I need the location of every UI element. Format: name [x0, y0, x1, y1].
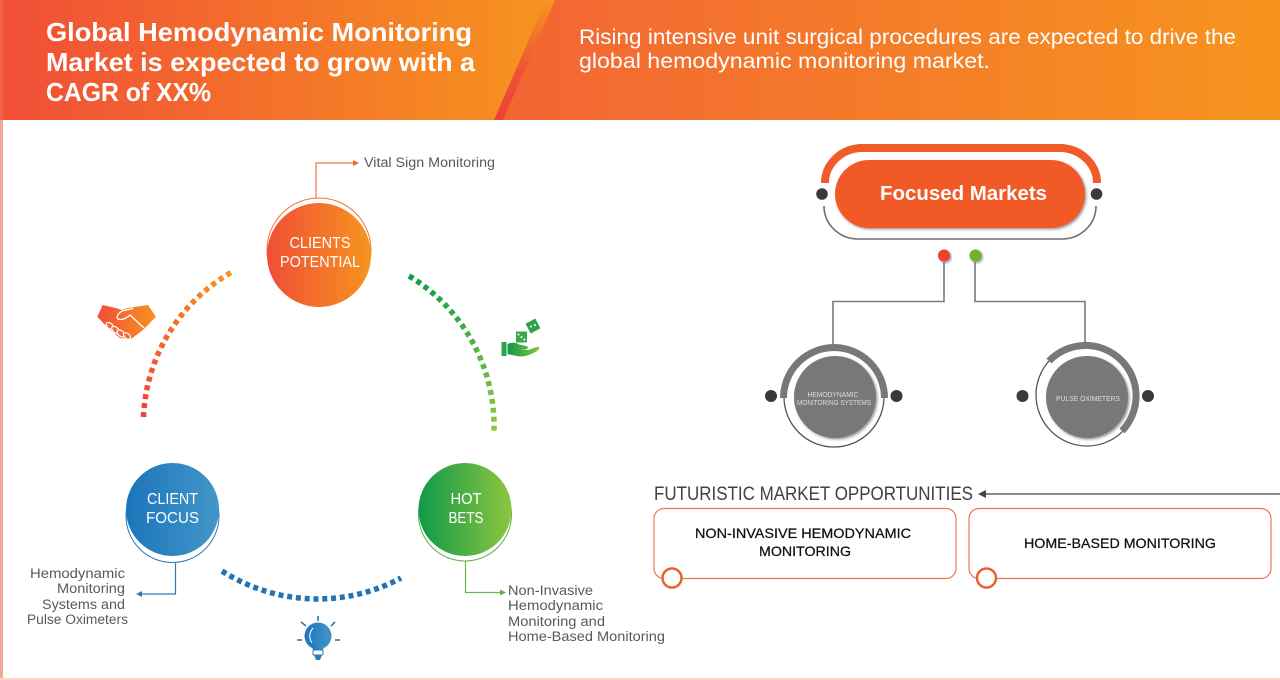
heading: futuristic market opportunities: FUTURISTIC MARKET OPPORTUNITIES: [654, 484, 973, 505]
node: hemodynamic monitoring systems: MONITORING SYSTEMS: [797, 398, 871, 407]
node: client focus: FOCUS: [146, 510, 199, 527]
label: client focus details: Pulse Oximeters: [27, 612, 128, 627]
card: non-invasive hemodynamic monitoring: NON-INVASIVE HEMODYNAMIC: [695, 525, 911, 541]
header banner: [0, 0, 1280, 120]
focused markets badge: Focused Markets: [880, 183, 1047, 205]
label: client focus details: Systems and: [42, 597, 125, 612]
label: hot bets details: Hemodynamic: [508, 598, 603, 613]
dashed arc: clients potential to client focus: [144, 272, 232, 417]
icon: light bulb: [297, 616, 340, 660]
title: Global Hemodynamic Monitoring: [46, 17, 472, 47]
card: home-based monitoring: [969, 508, 1271, 588]
icon: hand with dice: [502, 319, 540, 356]
node: clients potential: [267, 198, 371, 307]
subtitle: [579, 25, 1236, 73]
label: hot bets details: Monitoring and: [508, 614, 605, 629]
label: client focus details: [27, 566, 128, 627]
label: hot bets details: Non-Invasive: [508, 583, 593, 598]
node: hemodynamic monitoring systems: HEMODYNAMIC: [808, 390, 859, 399]
card: non-invasive hemodynamic monitoring: [654, 508, 956, 588]
title: Market is expected to grow with a: [46, 47, 476, 77]
node: pulse oximeters: [1016, 344, 1154, 446]
label: hot bets details: [508, 583, 665, 644]
node: clients potential: POTENTIAL: [280, 254, 360, 271]
label: client focus details: Monitoring: [57, 581, 125, 596]
connector: pulse oximeters: [970, 250, 1085, 344]
title: CAGR of XX%: [46, 77, 211, 107]
connector: client focus: [136, 563, 176, 597]
node: client focus: CLIENT: [147, 491, 198, 508]
focused markets badge: [816, 148, 1102, 239]
label: hot bets details: Home-Based Monitoring: [508, 629, 665, 644]
connector: vital sign: [316, 160, 359, 198]
node: hemodynamic monitoring systems: [765, 348, 902, 447]
connector: hemodynamic monitoring systems: [833, 250, 950, 344]
node: hot bets: HOT: [450, 491, 482, 508]
icon: handshake: [97, 305, 156, 340]
node: hot bets: [418, 463, 512, 561]
subtitle: global hemodynamic monitoring market.: [579, 49, 990, 73]
node: client focus: [126, 463, 219, 562]
card: home-based monitoring: HOME-BASED MONITORING: [1024, 535, 1216, 551]
node: hot bets: BETS: [448, 510, 484, 527]
title: [46, 17, 476, 107]
dashed arc: clients potential to hot bets: [409, 276, 494, 431]
subtitle: Rising intensive unit surgical procedures are expected to drive the: [579, 25, 1236, 49]
node: clients potential: CLIENTS: [290, 235, 350, 252]
arrow: futuristic market opportunities: [978, 490, 1280, 498]
node: pulse oximeters: PULSE OXIMETERS: [1056, 394, 1120, 403]
dashed arc: client focus to hot bets: [222, 571, 401, 599]
label: client focus details: Hemodynamic: [30, 566, 125, 581]
label: vital sign monitoring: Vital Sign Monitoring: [364, 155, 495, 170]
connector: hot bets: [466, 561, 506, 596]
card: non-invasive hemodynamic monitoring: MONITORING: [759, 543, 851, 559]
